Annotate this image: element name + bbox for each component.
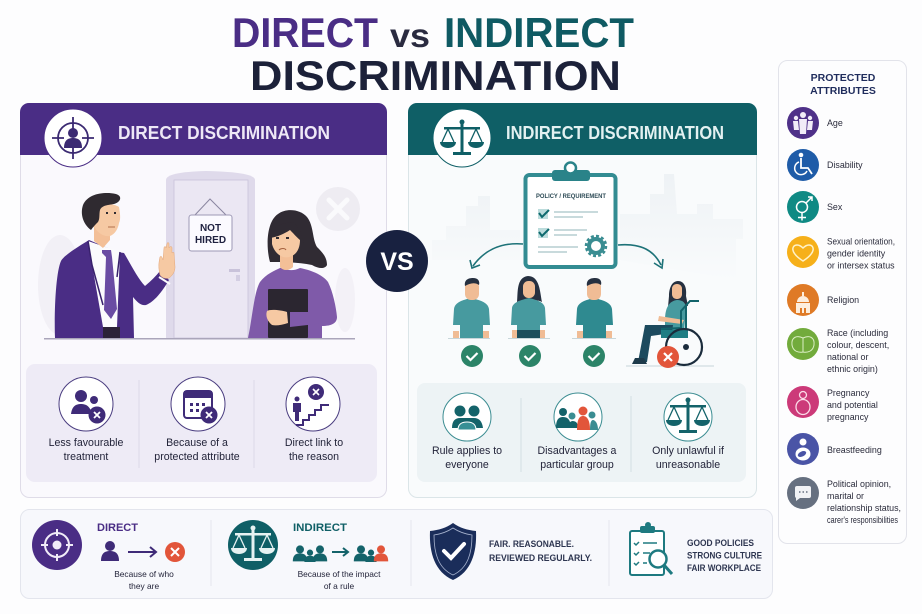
point: disadvantages a group: Disadvantages a bbox=[538, 445, 617, 457]
summary: good policies: FAIR WORKPLACE bbox=[687, 563, 761, 573]
man in suit bbox=[55, 193, 175, 338]
icon: scales bbox=[433, 109, 491, 167]
point: less favourable treatment: treatment bbox=[64, 451, 108, 463]
attribute: political opinion: Political opinion, bbox=[827, 479, 891, 489]
point: rule applies to everyone bbox=[432, 393, 502, 471]
title bbox=[232, 9, 634, 99]
summary: fair shield bbox=[430, 523, 592, 580]
summary: direct bbox=[32, 520, 185, 591]
sign: not hired: NOT bbox=[200, 223, 221, 234]
check: person 1 bbox=[461, 345, 483, 367]
attribute: political opinion: carer's responsibilities bbox=[827, 515, 898, 525]
attribute: age: Age bbox=[827, 118, 843, 128]
point: less favourable treatment bbox=[49, 377, 124, 463]
point: protected attribute bbox=[154, 377, 240, 463]
indirect header band bbox=[408, 103, 757, 155]
check: person 2 bbox=[519, 345, 541, 367]
point: only unlawful if unreasonable: Only unlawful if bbox=[652, 445, 724, 457]
attribute: pregnancy: Pregnancy bbox=[827, 388, 870, 398]
panel: indirect discrimination bbox=[408, 103, 757, 498]
person 3 bbox=[576, 278, 613, 338]
title: DISCRIMINATION bbox=[250, 52, 621, 99]
point: rule applies to everyone: everyone bbox=[445, 459, 489, 471]
person 2 bbox=[511, 276, 546, 338]
attribute: sexual orientation: or intersex status bbox=[827, 260, 895, 270]
wheelchair user bbox=[632, 281, 702, 368]
clipboard: policy requirement bbox=[526, 162, 616, 267]
direct key points strip bbox=[26, 364, 377, 482]
title: DIRECT bbox=[232, 9, 378, 56]
attribute: pregnancy bbox=[787, 386, 878, 422]
attribute: breastfeeding: Breastfeeding bbox=[827, 445, 882, 455]
attribute: sex bbox=[787, 191, 843, 223]
summary: direct: they are bbox=[129, 581, 159, 591]
sidebar: protected attributes bbox=[778, 60, 906, 544]
people row bbox=[448, 276, 714, 368]
vs badge: VS bbox=[380, 248, 414, 276]
vs badge bbox=[366, 230, 428, 292]
attribute: age bbox=[787, 107, 843, 139]
check: person 3 bbox=[583, 345, 605, 367]
attribute: disability: Disability bbox=[827, 160, 863, 170]
attribute: race: colour, descent, bbox=[827, 340, 889, 350]
attribute: political opinion: marital or bbox=[827, 491, 864, 501]
direct header band bbox=[20, 103, 387, 155]
point: only unlawful if unreasonable bbox=[652, 393, 724, 471]
sidebar heading: PROTECTED bbox=[811, 72, 876, 84]
point: rule applies to everyone: Rule applies to bbox=[432, 445, 502, 457]
summary: direct: DIRECT bbox=[97, 522, 138, 534]
indirect heading: INDIRECT DISCRIMINATION bbox=[506, 122, 724, 143]
attribute: sexual orientation: gender identity bbox=[827, 248, 886, 258]
attribute: political opinion bbox=[787, 477, 901, 525]
title: INDIRECT bbox=[444, 9, 634, 56]
summary: fair shield: FAIR. REASONABLE. bbox=[489, 539, 574, 549]
summary: good policies: GOOD POLICIES bbox=[687, 538, 754, 548]
attribute: race: Race (including bbox=[827, 328, 888, 338]
title: vs bbox=[390, 17, 430, 54]
attribute: race bbox=[787, 328, 889, 374]
attribute: sexual orientation: Sexual orientation, bbox=[827, 236, 895, 246]
summary: indirect: of a rule bbox=[324, 581, 354, 591]
bottom summary strip bbox=[20, 510, 772, 598]
point: direct link: Direct link to bbox=[285, 437, 343, 449]
summary: indirect: INDIRECT bbox=[293, 522, 347, 534]
point: direct link bbox=[285, 377, 343, 463]
x badge bbox=[657, 346, 679, 368]
person 1 bbox=[453, 278, 490, 338]
point: protected attribute: Because of a bbox=[166, 437, 228, 449]
attribute: pregnancy: pregnancy bbox=[827, 412, 869, 422]
point: disadvantages a group bbox=[538, 393, 617, 471]
attribute: sexual orientation bbox=[787, 236, 895, 270]
panel: direct discrimination bbox=[20, 103, 387, 498]
faded skyline bbox=[432, 174, 743, 280]
summary: good policies bbox=[630, 522, 762, 575]
attribute: breastfeeding bbox=[787, 433, 882, 465]
icon: target person bbox=[44, 109, 102, 167]
attribute: sex: Sex bbox=[827, 202, 843, 212]
attribute: religion bbox=[787, 284, 859, 316]
summary: indirect: Because of the impact bbox=[298, 569, 381, 579]
woman with folder bbox=[248, 210, 337, 338]
attribute: pregnancy: and potential bbox=[827, 400, 878, 410]
summary: direct: Because of who bbox=[114, 569, 174, 579]
direct heading: DIRECT DISCRIMINATION bbox=[118, 122, 330, 143]
indirect key points strip bbox=[417, 383, 746, 482]
attribute: race: national or bbox=[827, 352, 868, 362]
sign: not hired bbox=[189, 199, 232, 251]
point: disadvantages a group: particular group bbox=[540, 459, 614, 471]
sign: not hired: HIRED bbox=[195, 235, 226, 246]
clipboard: policy requirement: POLICY / REQUIREMENT bbox=[536, 193, 606, 200]
point: less favourable treatment: Less favourable bbox=[49, 437, 124, 449]
attribute: disability bbox=[787, 149, 863, 181]
summary: fair shield: REVIEWED REGULARLY. bbox=[489, 553, 592, 563]
illustration: not hired scene bbox=[38, 171, 360, 340]
attribute: religion: Religion bbox=[827, 295, 859, 305]
point: only unlawful if unreasonable: unreasonable bbox=[656, 459, 720, 471]
attribute: race: ethnic origin) bbox=[827, 364, 878, 374]
attribute: political opinion: relationship status, bbox=[827, 503, 901, 513]
arrows to people bbox=[470, 244, 663, 268]
point: direct link: the reason bbox=[289, 451, 339, 463]
sidebar: protected attributes: ATTRIBUTES bbox=[810, 85, 876, 97]
x badge faded bbox=[316, 187, 360, 231]
summary: indirect bbox=[228, 520, 388, 591]
summary: good policies: STRONG CULTURE bbox=[687, 550, 762, 560]
point: protected attribute: protected attribute bbox=[154, 451, 240, 463]
